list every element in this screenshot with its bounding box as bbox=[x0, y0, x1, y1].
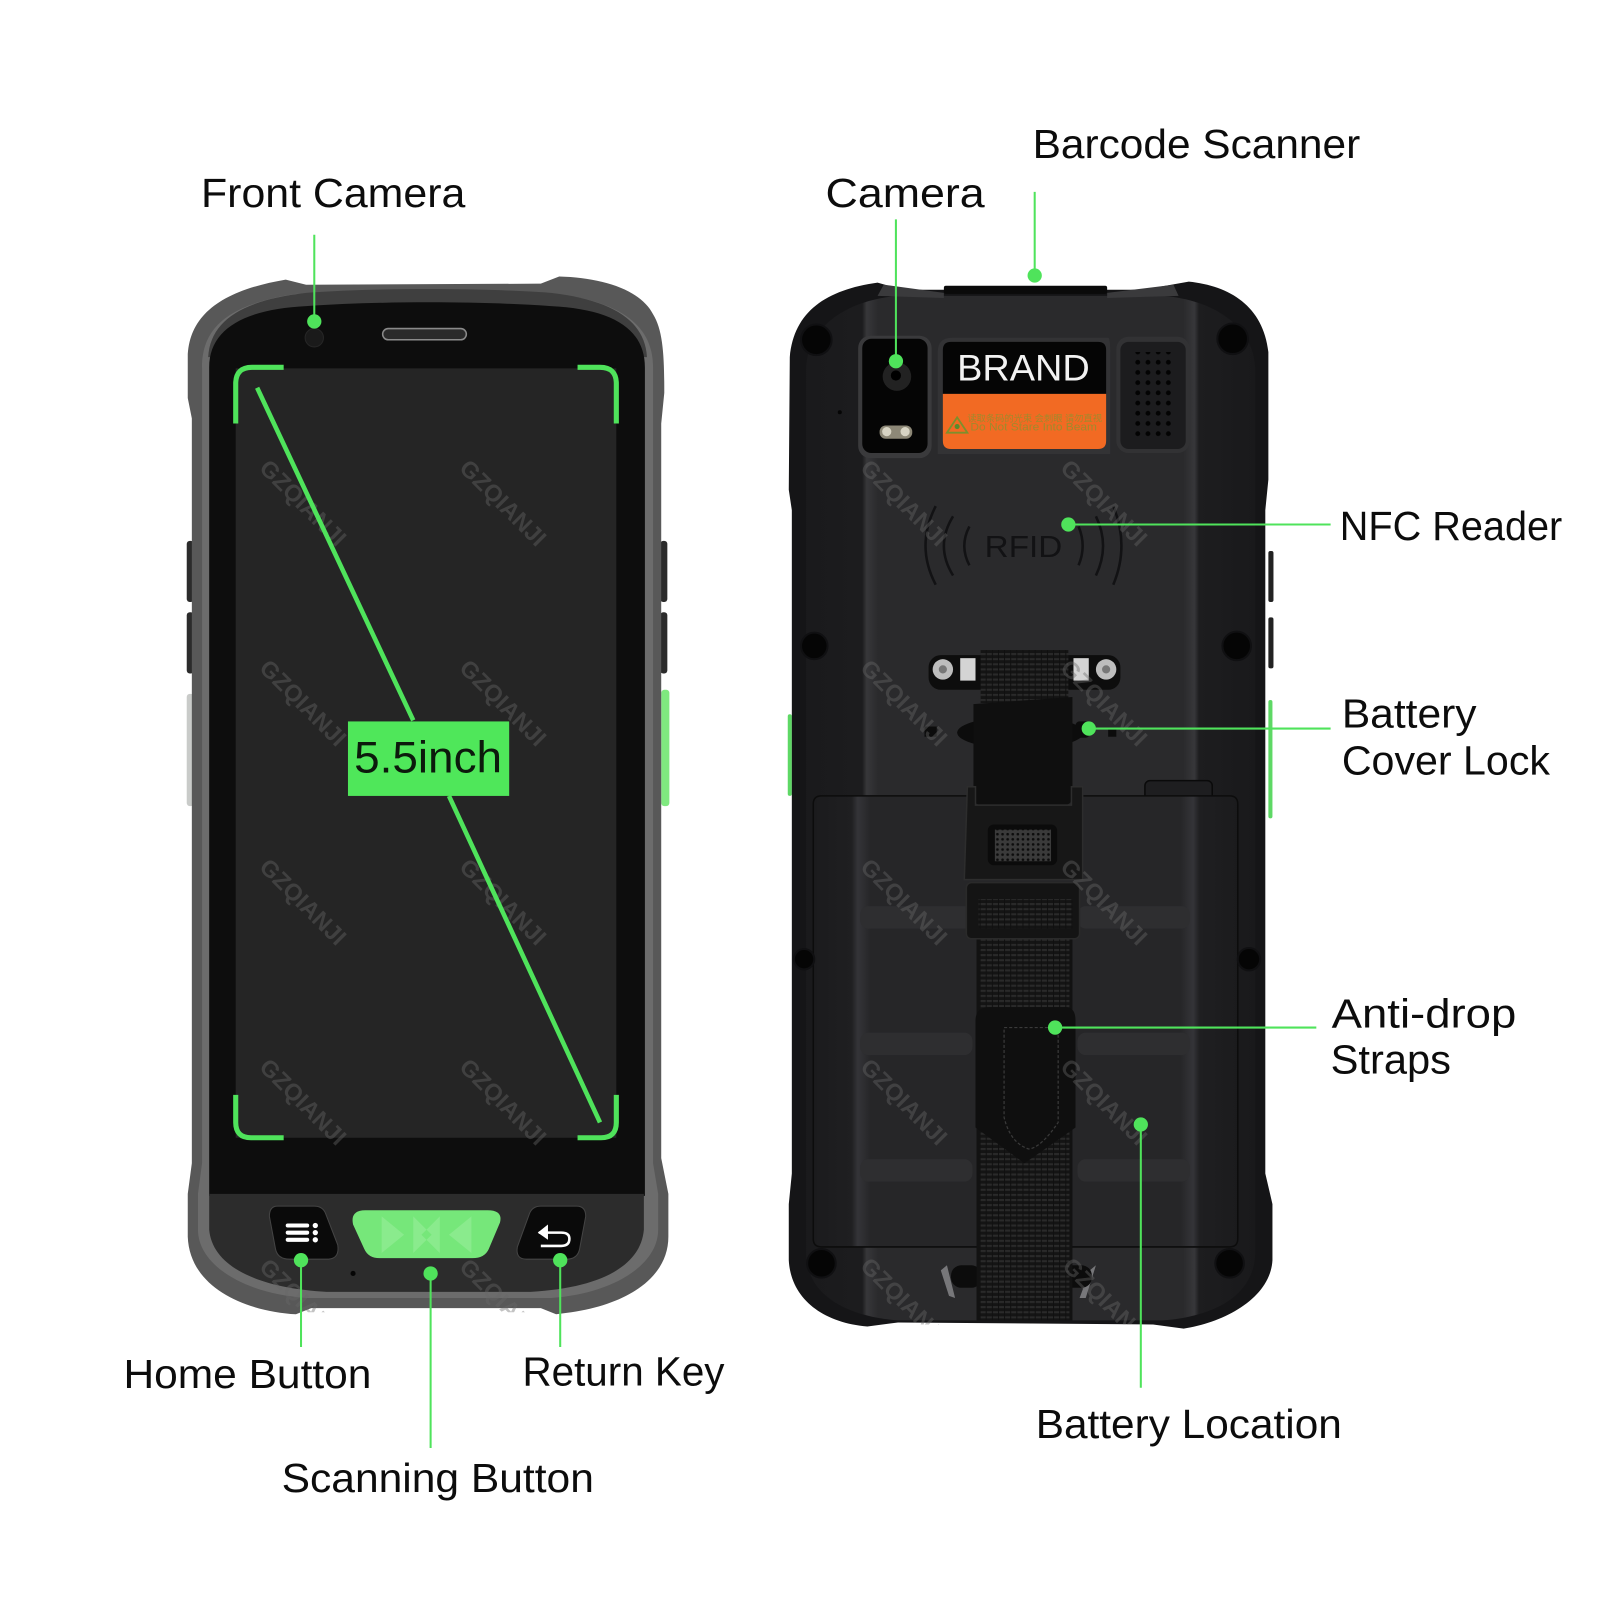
black glass face bbox=[209, 302, 645, 1196]
callout: home button: Home Button bbox=[123, 1351, 371, 1397]
callout: barcode scanner: Barcode Scanner bbox=[1033, 121, 1360, 167]
brand label: BRAND bbox=[957, 348, 1090, 389]
side buttons right bbox=[660, 541, 669, 806]
callout: barcode scanner bbox=[1028, 121, 1360, 283]
callout: anti-drop straps bbox=[1048, 991, 1516, 1082]
watermarks: GZQIANJI bbox=[455, 854, 551, 950]
screws bbox=[794, 323, 1260, 1278]
watermarks: GZQIANJI bbox=[856, 655, 952, 751]
battery cover bbox=[813, 781, 1238, 1247]
callout: battery cover lock: Battery bbox=[1342, 691, 1477, 737]
callout: NFC reader: NFC Reader bbox=[1340, 503, 1562, 549]
watermarks: GZQIANJI bbox=[1058, 1252, 1154, 1349]
callout: battery location: Battery Location bbox=[1036, 1401, 1342, 1447]
home button bbox=[269, 1206, 338, 1259]
RFID mark: RFID bbox=[985, 530, 1062, 564]
watermarks: GZQIANJI bbox=[455, 655, 551, 751]
watermarks: GZQIANJI bbox=[455, 1054, 551, 1150]
front phone bbox=[187, 277, 669, 1314]
corner brackets bbox=[236, 367, 616, 1138]
brand label: Do Not Stare Into Beam bbox=[970, 422, 1097, 434]
microphone hole bbox=[351, 1271, 356, 1276]
watermarks: GZQIANJI bbox=[255, 655, 351, 751]
watermarks: GZQIANJI bbox=[255, 1054, 351, 1150]
upper buckle bbox=[964, 787, 1083, 880]
callout: return key bbox=[522, 1253, 725, 1395]
watermarks: GZQIANJI bbox=[1056, 854, 1152, 950]
diagonal line bbox=[257, 388, 600, 1122]
watermarks: GZQIANJI bbox=[455, 455, 551, 551]
top rim highlights bbox=[878, 285, 1179, 298]
callout: anti-drop straps: Anti-drop bbox=[1332, 991, 1516, 1037]
size badge: 5.5inch bbox=[354, 731, 502, 782]
lower hinge marks bbox=[941, 1265, 1096, 1298]
watermarks: GZQIANJI bbox=[455, 1254, 551, 1350]
callout: NFC reader bbox=[1061, 503, 1562, 549]
brand label: 读取条码的光束 会刺眼 请勿直视 bbox=[967, 412, 1102, 423]
bumper highlight bbox=[198, 294, 658, 1298]
callout: battery location bbox=[1036, 1117, 1342, 1447]
callout: home button bbox=[123, 1253, 371, 1397]
RFID mark bbox=[926, 506, 1121, 585]
watermarks: GZQIANJI bbox=[1056, 655, 1152, 751]
lower velcro patch bbox=[976, 1007, 1076, 1163]
watermarks: GZQIANJI bbox=[1056, 455, 1152, 551]
scan button bbox=[353, 1210, 501, 1258]
back phone bbox=[788, 282, 1273, 1329]
dark upper rim bbox=[208, 289, 647, 357]
back centre panel bbox=[806, 296, 1255, 1320]
watermarks: GZQIANJI bbox=[856, 455, 952, 551]
size badge bbox=[348, 721, 509, 796]
watermarks: GZQIANJI bbox=[255, 1254, 351, 1350]
watermarks: GZQIANJI bbox=[1056, 1054, 1152, 1150]
lower key panel bbox=[209, 1194, 644, 1292]
watermarks: GZQIANJI bbox=[856, 1054, 952, 1150]
brand label bbox=[938, 338, 1110, 454]
lower buckle bbox=[966, 883, 1080, 939]
front lens bbox=[305, 329, 323, 347]
watermarks: GZQIANJI bbox=[255, 455, 351, 551]
strap mount bbox=[929, 655, 1120, 690]
back side buttons bbox=[788, 551, 1273, 818]
callout: scanning button: Scanning Button bbox=[282, 1455, 594, 1501]
watermarks bbox=[255, 455, 1154, 1350]
battery lock bbox=[924, 716, 1116, 749]
cover ribs bbox=[860, 906, 1190, 1182]
callout: battery cover lock bbox=[1082, 691, 1551, 783]
callout: camera bbox=[826, 170, 985, 368]
callout: front camera: Front Camera bbox=[201, 170, 466, 216]
screen bbox=[236, 368, 616, 1138]
watermarks: GZQIANJI bbox=[856, 854, 952, 950]
screen size overlay bbox=[236, 367, 616, 1138]
rubber bumper bbox=[188, 277, 668, 1314]
callout: camera: Camera bbox=[826, 170, 985, 216]
callout: scanning button bbox=[282, 1266, 594, 1501]
back shell bbox=[789, 282, 1272, 1329]
return key bbox=[517, 1206, 586, 1259]
callout: front camera bbox=[201, 170, 466, 329]
small hole bbox=[838, 410, 842, 414]
scanner window bbox=[944, 286, 1107, 294]
watermarks: GZQIANJI bbox=[856, 1252, 952, 1349]
watermarks: GZQIANJI bbox=[255, 854, 351, 950]
upper velcro pad bbox=[973, 697, 1072, 805]
speaker slot bbox=[383, 329, 466, 340]
callout: anti-drop straps: Straps bbox=[1331, 1036, 1451, 1082]
camera module bbox=[858, 336, 932, 458]
side buttons left bbox=[187, 541, 194, 806]
speaker grille bbox=[1116, 337, 1190, 453]
hand strap bbox=[964, 650, 1083, 1320]
callout: battery cover lock: Cover Lock bbox=[1342, 737, 1551, 783]
callout: return key: Return Key bbox=[522, 1349, 725, 1395]
